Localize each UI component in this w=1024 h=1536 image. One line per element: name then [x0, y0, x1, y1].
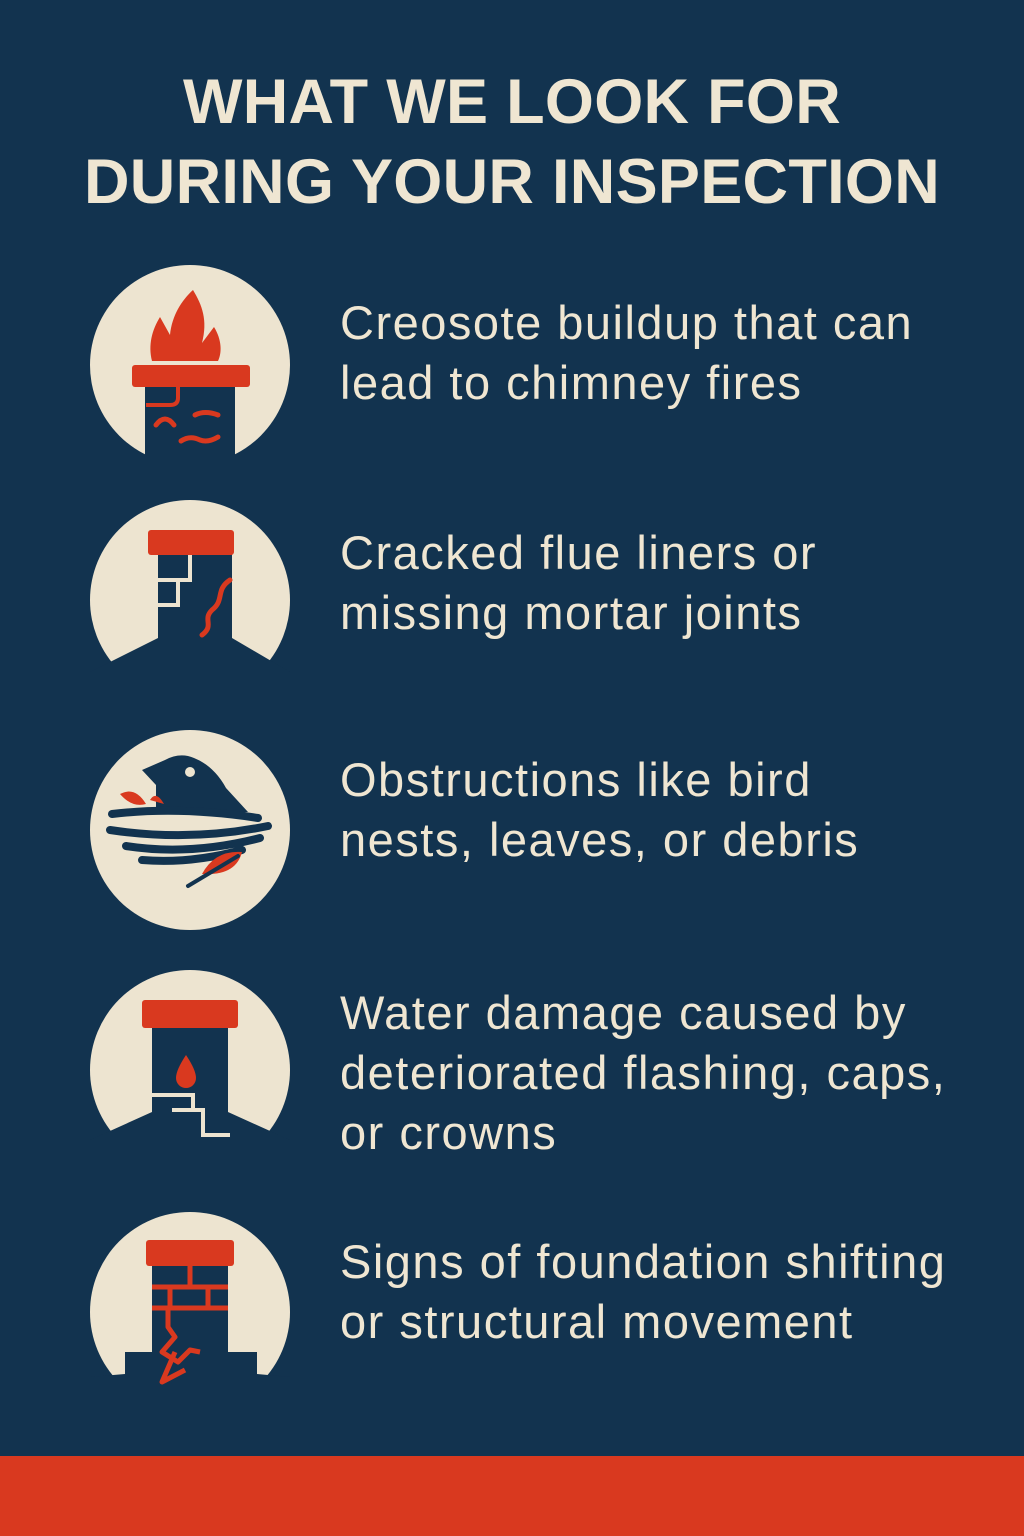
- icon: water damage: [90, 970, 290, 1137]
- title: DURING YOUR INSPECTION: [84, 147, 940, 217]
- text: creosote: [340, 296, 913, 409]
- title: [84, 67, 940, 217]
- text: obstructions: [340, 753, 859, 866]
- title: WHAT WE LOOK FOR: [183, 67, 841, 137]
- text: creosote: Creosote buildup that can: [340, 296, 913, 349]
- text: water damage: [340, 986, 946, 1159]
- text: obstructions: nests, leaves, or debris: [340, 813, 859, 866]
- text: cracked: Cracked flue liners or: [340, 526, 817, 579]
- text: creosote: lead to chimney fires: [340, 356, 803, 409]
- text: cracked: [340, 526, 817, 639]
- text: foundation: or structural movement: [340, 1295, 854, 1348]
- text: obstructions: Obstructions like bird: [340, 753, 812, 806]
- text: water damage: or crowns: [340, 1106, 557, 1159]
- icon: foundation: [90, 1212, 290, 1384]
- icon: bird nest: [90, 730, 290, 930]
- text: water damage: Water damage caused by: [340, 986, 907, 1039]
- text: foundation: [340, 1235, 946, 1348]
- text: water damage: deteriorated flashing, caps,: [340, 1046, 946, 1099]
- icon: chimney fire: [90, 265, 290, 454]
- icon: cracked flue: [90, 500, 290, 662]
- footer bar: [0, 1456, 1024, 1536]
- text: cracked: missing mortar joints: [340, 586, 802, 639]
- text: foundation: Signs of foundation shifting: [340, 1235, 946, 1288]
